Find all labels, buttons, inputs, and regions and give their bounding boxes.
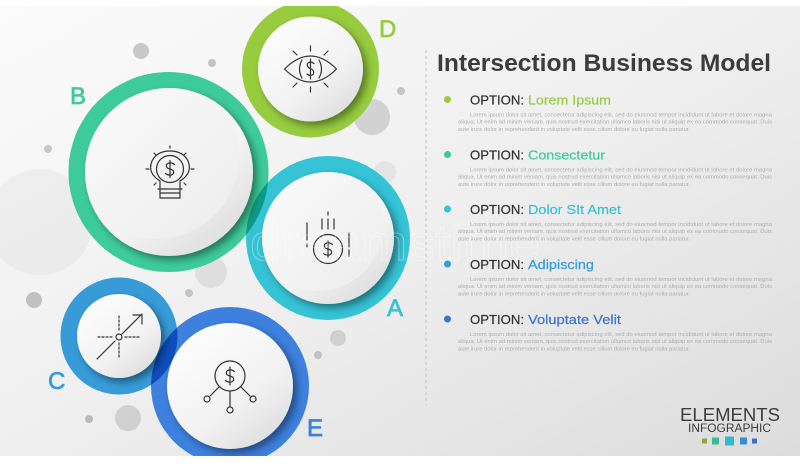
option 2: aute irure dolor in reprehenderit in voluptate velit esse cillum dolore eu fugiat nulla pariatur.	[458, 182, 690, 188]
option 5: Voluptate Velit	[528, 312, 621, 327]
option 4: OPTION:	[470, 257, 524, 272]
option 2: Lorem ipsum dolor sit amet, consectetur adipiscing elit, sed do eiusmod tempor incididunt ut labore et dolore magna	[470, 168, 772, 174]
option 2	[444, 148, 772, 188]
option 3	[444, 202, 772, 242]
colored rings	[60, 0, 410, 465]
option 1: Lorem ipsum dolor sit amet, consectetur adipiscing elit, sed do eiusmod tempor incididunt ut labore et dolore magna	[470, 112, 772, 118]
option 4: Lorem ipsum dolor sit amet, consectetur adipiscing elit, sed do eiusmod tempor incididunt ut labore et dolore magna	[470, 277, 772, 283]
letter labels: D	[379, 16, 396, 43]
logo: ELEMENTS	[680, 405, 780, 425]
icon: dollar network	[204, 361, 256, 413]
logo: INFOGRAPHIC	[688, 423, 771, 435]
option 2: OPTION:	[470, 148, 524, 162]
title: Intersection Business Model	[437, 50, 771, 77]
option 3: aliqua. Ut enim ad minim veniam, quis nostrud exercitation ullamco laboris nisi ut aliquip ex ea commodo consequat. Duis	[458, 229, 772, 235]
logo	[680, 405, 780, 446]
letter labels: E	[307, 415, 323, 442]
option 4: aliqua. Ut enim ad minim veniam, quis nostrud exercitation ullamco laboris nisi ut aliquip ex ea commodo consequat. Duis	[458, 284, 772, 290]
letter labels: C	[48, 368, 65, 395]
option 1: OPTION:	[470, 92, 524, 108]
option 1: aliqua. Ut enim ad minim veniam, quis nostrud exercitation ullamco laboris nisi ut aliquip ex ea commodo consequat. Duis	[458, 120, 772, 126]
option 3: OPTION:	[470, 202, 524, 217]
option 5: Lorem ipsum dolor sit amet, consectetur adipiscing elit, sed do eiusmod tempor incididunt ut labore et dolore magna	[470, 332, 772, 338]
option 4	[444, 257, 772, 298]
option 1: Lorem Ipsum	[528, 92, 611, 108]
option 4: Adipiscing	[528, 257, 594, 272]
option 4: aute irure dolor in reprehenderit in voluptate velit esse cillum dolore eu fugiat nulla pariatur.	[458, 292, 690, 298]
option 2: aliqua. Ut enim ad minim veniam, quis nostrud exercitation ullamco laboris nisi ut aliquip ex ea commodo consequat. Duis	[458, 174, 772, 180]
divider	[425, 50, 427, 405]
decorative grey dots	[0, 43, 405, 431]
option 2: Consectetur	[528, 148, 606, 162]
option 1: aute irure dolor in reprehenderit in voluptate velit esse cillum dolore eu fugiat nulla pariatur.	[458, 127, 690, 133]
option 5: aute irure dolor in reprehenderit in voluptate velit esse cillum dolore eu fugiat nulla pariatur.	[458, 346, 690, 352]
icon: light bulb with dollar	[146, 146, 194, 198]
icon: falling dollar coin	[307, 212, 349, 264]
option 3: Lorem ipsum dolor sit amet, consectetur adipiscing elit, sed do eiusmod tempor incididunt ut labore et dolore magna	[470, 222, 772, 228]
option list	[444, 92, 772, 352]
white discs	[73, 16, 394, 449]
option 5: aliqua. Ut enim ad minim veniam, quis nostrud exercitation ullamco laboris nisi ut aliquip ex ea commodo consequat. Duis	[458, 339, 772, 345]
letter labels: B	[70, 83, 86, 110]
option 1	[444, 92, 772, 133]
option 5: OPTION:	[470, 312, 524, 327]
option 5	[444, 312, 772, 352]
watermark: dreamstime	[250, 215, 540, 271]
option 3: Dolor SIt Amet	[528, 202, 621, 217]
icon: growth arrow	[97, 314, 142, 359]
letter labels: A	[387, 295, 403, 322]
icon: eye with dollar	[284, 46, 336, 92]
letter labels	[48, 16, 403, 442]
option 3: aute irure dolor in reprehenderit in voluptate velit esse cillum dolore eu fugiat nulla pariatur.	[458, 236, 690, 242]
